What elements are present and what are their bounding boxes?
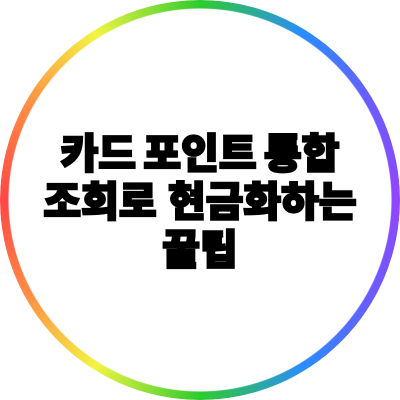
title: 카드 포인트 통합 (61, 130, 339, 176)
title: 조회로 현금화하는 (43, 178, 357, 224)
title: 꿀팁 (162, 226, 238, 272)
title (43, 130, 357, 272)
